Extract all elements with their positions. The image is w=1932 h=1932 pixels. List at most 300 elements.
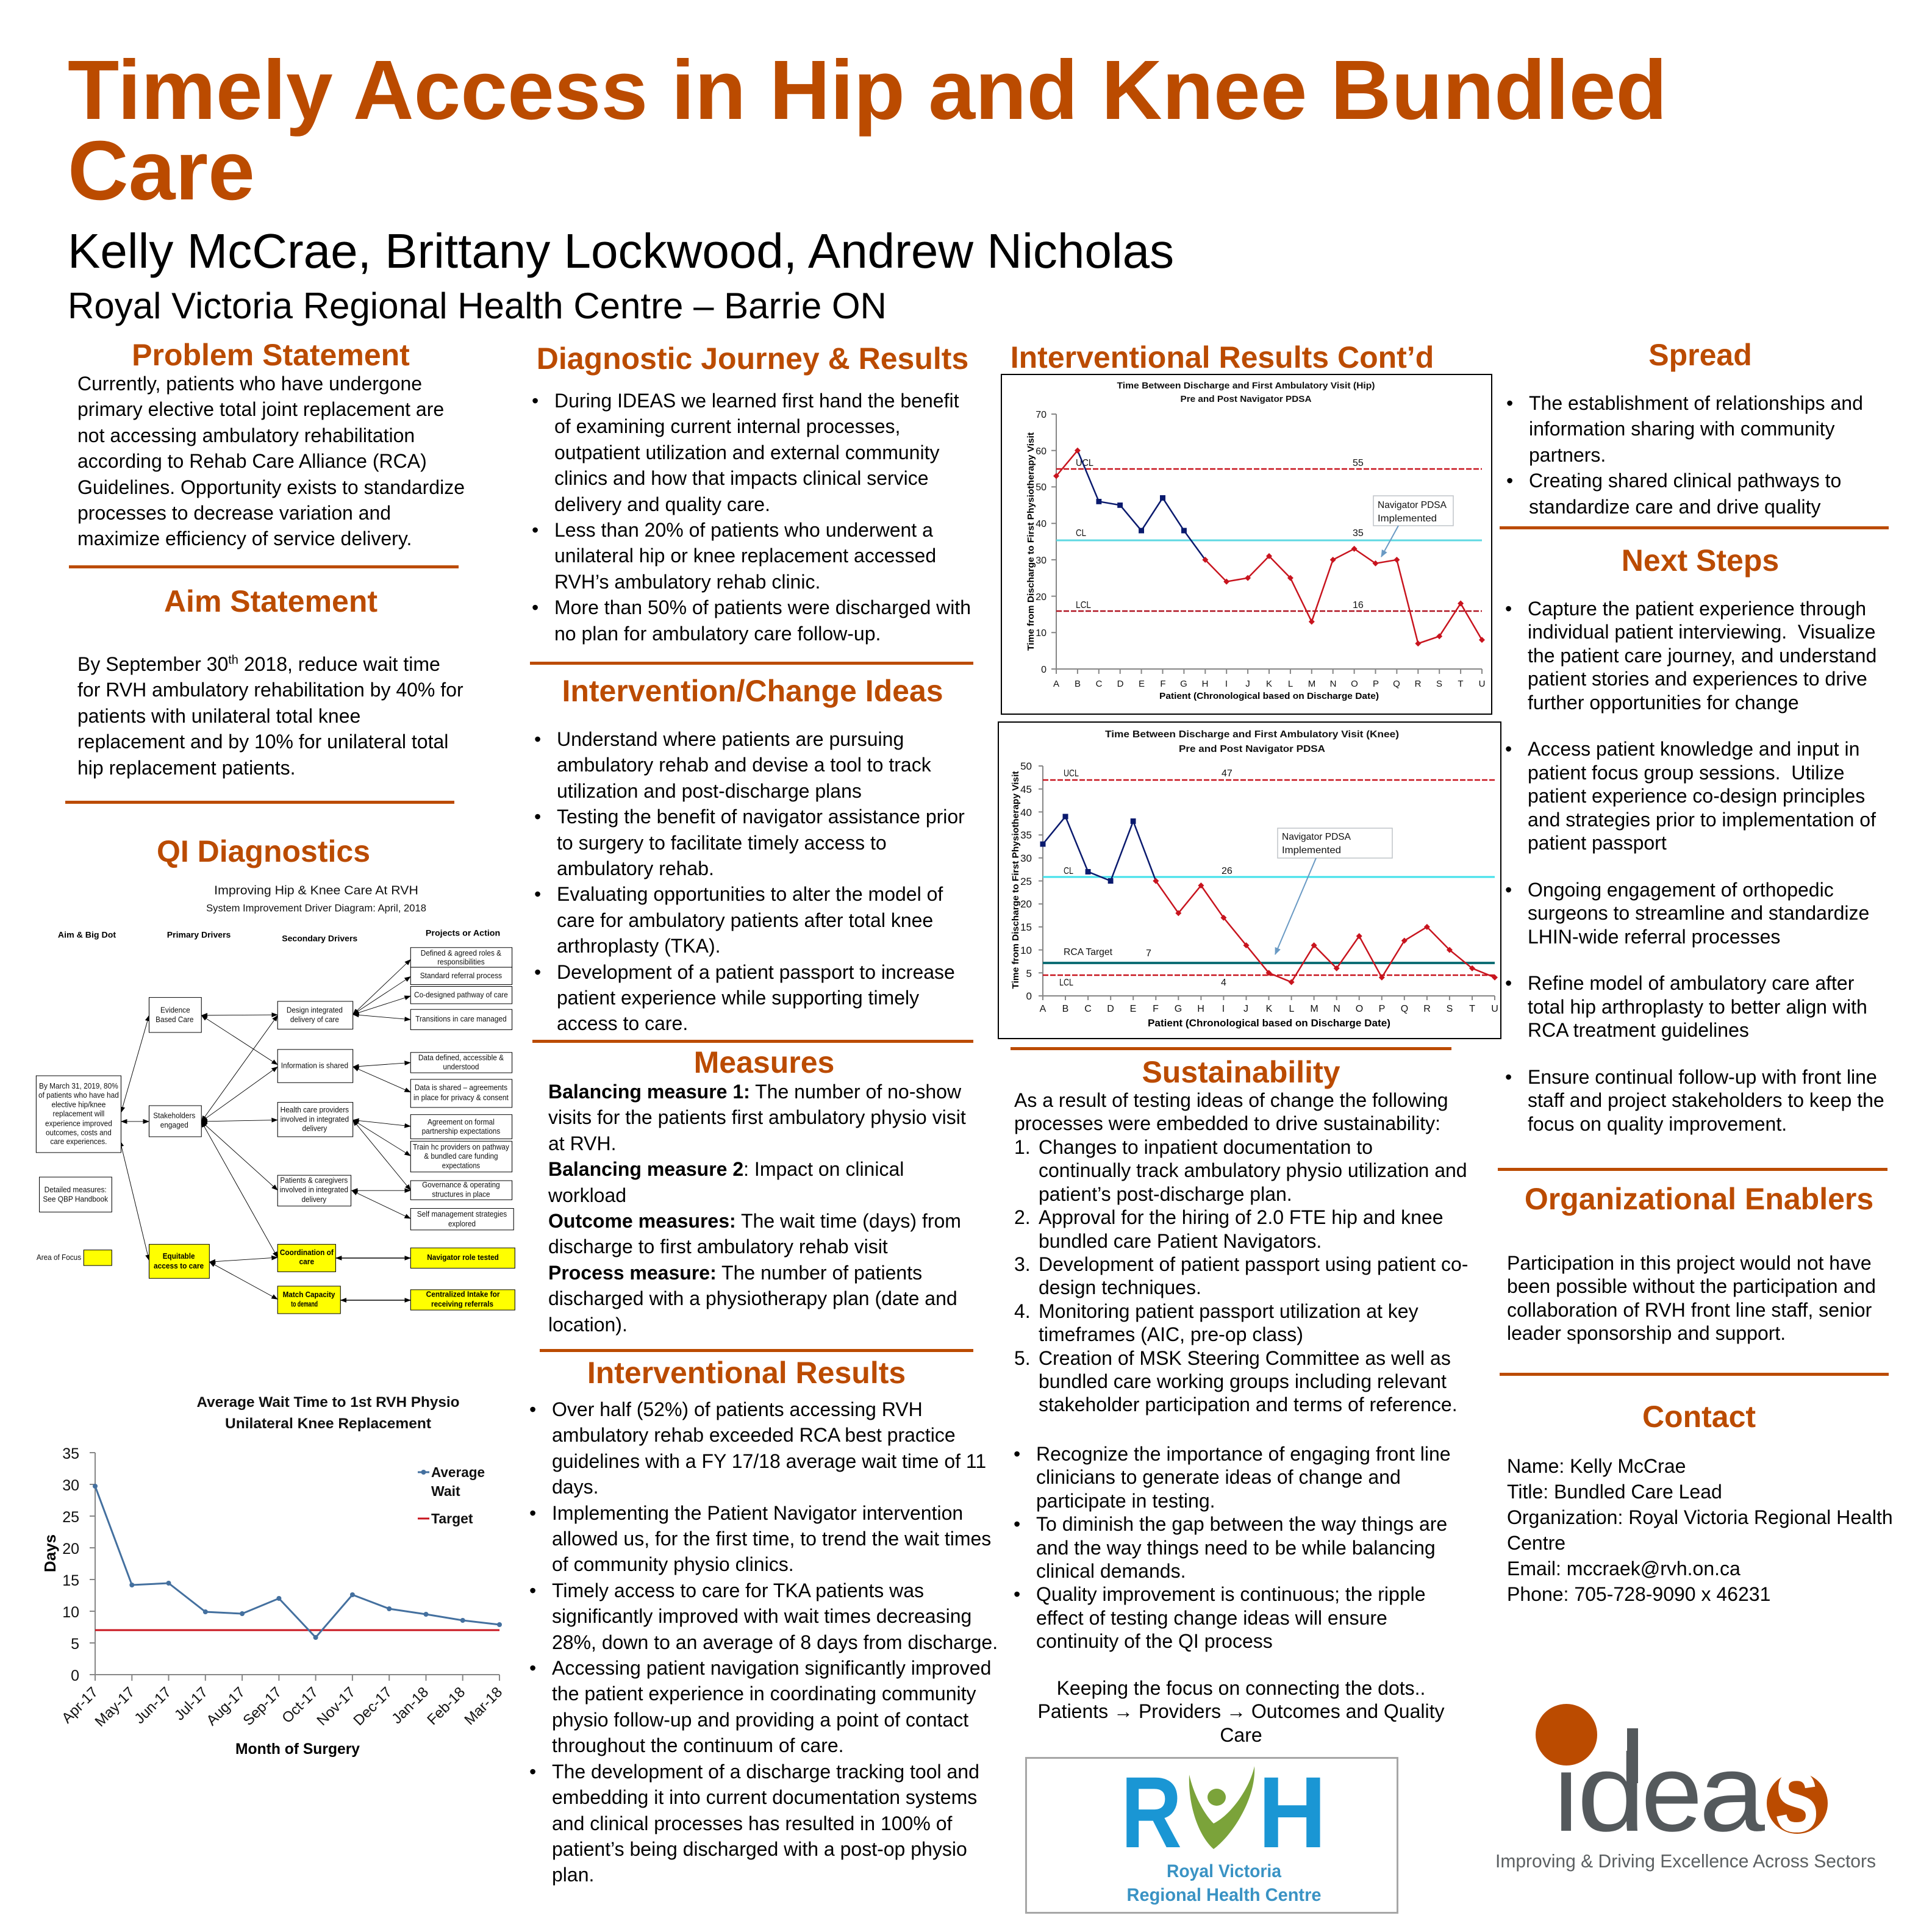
box labels: Co-designed pathway of care bbox=[414, 990, 508, 1000]
bullets: change ideas: arthroplasty (TKA). bbox=[557, 935, 721, 957]
heading: organizational enablers: Organizational Enablers bbox=[1525, 1182, 1873, 1216]
chart title: Unilateral Knee Replacement bbox=[225, 1415, 431, 1432]
x labels: K bbox=[1266, 679, 1272, 689]
x labels: N bbox=[1333, 1004, 1340, 1014]
box labels: Based Care bbox=[156, 1015, 193, 1024]
x labels: M bbox=[1308, 679, 1315, 689]
box labels: Transitions in care managed bbox=[415, 1014, 507, 1023]
x labels: L bbox=[1288, 679, 1293, 689]
bullets: next steps: total hip arthroplasty to better align with bbox=[1528, 996, 1867, 1018]
box labels: See QBP Handbook bbox=[43, 1195, 108, 1203]
box labels: delivery bbox=[302, 1124, 327, 1133]
y axis labels: 20 bbox=[62, 1540, 79, 1558]
bullets: next steps: patient stories and experiences to drive bbox=[1528, 668, 1867, 690]
x labels: F bbox=[1153, 1004, 1159, 1014]
bullets: next steps: patient focus group sessions. Utilize bbox=[1528, 762, 1844, 784]
column headers bbox=[58, 929, 500, 943]
box labels: elective hip/knee bbox=[51, 1100, 106, 1109]
bullets: spread: information sharing with community bbox=[1529, 418, 1835, 440]
bullets: spread: The establishment of relationships and bbox=[1529, 392, 1863, 414]
box labels: delivery of care bbox=[290, 1015, 339, 1024]
callout: navigator PDSA: Navigator PDSA bbox=[1378, 500, 1447, 510]
text: aim statement bbox=[77, 653, 463, 779]
chart title bbox=[1117, 381, 1375, 404]
text: connecting the dots: Keeping the focus on connecting the dots.. bbox=[1057, 1677, 1425, 1699]
bullets: next steps bbox=[1505, 598, 1884, 1135]
heading: problem statement: Problem Statement bbox=[132, 338, 410, 372]
numbered list: sustainability: 4. bbox=[1014, 1300, 1031, 1322]
focus box labels: care bbox=[299, 1258, 314, 1266]
bullets: interventional results: guidelines with a FY 17/18 average wait time of 11 bbox=[552, 1450, 986, 1472]
y axis labels: 0 bbox=[71, 1667, 79, 1684]
chart title bbox=[1105, 729, 1399, 754]
bullets: sustainability: participate in testing. bbox=[1036, 1490, 1215, 1512]
y labels: 40 bbox=[1036, 519, 1046, 529]
text: connecting the dots: Patients → Providers → Outcomes and Quality bbox=[1038, 1700, 1444, 1722]
bullets: interventional results: significantly improved with wait times decreasing bbox=[552, 1605, 971, 1627]
box labels: in place for privacy & consent bbox=[413, 1093, 509, 1102]
box labels: Standard referral process bbox=[420, 971, 503, 980]
chart title: Average Wait Time to 1st RVH Physio bbox=[196, 1394, 460, 1411]
focus box labels: receiving referrals bbox=[431, 1300, 493, 1308]
axis titles bbox=[1011, 771, 1390, 1029]
x labels: R bbox=[1423, 1004, 1431, 1014]
panel: next steps bbox=[1505, 543, 1884, 1135]
text: measures: discharged with a physiotherapy plan (date and bbox=[548, 1287, 957, 1309]
logo: RVH: H bbox=[1258, 1756, 1326, 1869]
box labels: Design integrated bbox=[287, 1006, 343, 1014]
numbered list: sustainability bbox=[1014, 1136, 1468, 1415]
title bbox=[68, 43, 1667, 218]
logo: IDEAS: s bbox=[1773, 1730, 1820, 1856]
x labels: H bbox=[1197, 1004, 1204, 1014]
y labels: 5 bbox=[1026, 968, 1032, 979]
bullets: change ideas: • bbox=[534, 806, 541, 828]
text: contact: Organization: Royal Victoria Regional Health bbox=[1507, 1506, 1893, 1528]
text: contact: Title: Bundled Care Lead bbox=[1507, 1481, 1722, 1503]
column headers: Primary Drivers bbox=[167, 931, 231, 940]
data line: start bbox=[1056, 451, 1078, 476]
x labels: C bbox=[1096, 679, 1103, 689]
x labels: F bbox=[1160, 679, 1166, 689]
control lines bbox=[1056, 469, 1482, 611]
x labels: Q bbox=[1393, 679, 1400, 689]
bullets: diagnostic journey bbox=[532, 390, 971, 645]
bullets: sustainability: and the way things need to be while balancing bbox=[1036, 1537, 1436, 1559]
bullets: interventional results: embedding it into current documentation systems bbox=[552, 1786, 977, 1808]
bullets: change ideas: • bbox=[534, 883, 541, 905]
x labels: M bbox=[1310, 1004, 1318, 1014]
text: organizational enablers: collaboration of RVH front line staff, senior bbox=[1507, 1299, 1872, 1321]
chart: hip control chart bbox=[1001, 374, 1492, 715]
y labels: 25 bbox=[1020, 876, 1032, 887]
text: measures: Balancing measure 1: The number of no-show bbox=[548, 1081, 961, 1103]
callout: navigator PDSA bbox=[1373, 496, 1453, 557]
chart title: Time Between Discharge and First Ambulatory Visit (Hip) bbox=[1117, 381, 1375, 391]
bullets: diagnostic journey: During IDEAS we learned first hand the benefit bbox=[554, 390, 959, 412]
x labels: K bbox=[1266, 1004, 1273, 1014]
driver boxes bbox=[36, 948, 513, 1230]
bullets: next steps: Refine model of ambulatory care after bbox=[1528, 972, 1854, 994]
control lines bbox=[1043, 780, 1495, 975]
bullets: spread: standardize care and drive quality bbox=[1529, 496, 1821, 518]
bullets: diagnostic journey: Less than 20% of patients who underwent a bbox=[554, 519, 933, 541]
bullets: diagnostic journey: outpatient utilization and external community bbox=[554, 442, 939, 463]
control line labels: 16 bbox=[1353, 600, 1364, 610]
diagram title: System Improvement Driver Diagram: April, 2018 bbox=[206, 902, 426, 914]
box labels bbox=[37, 948, 509, 1262]
bullets: next steps: staff and project stakeholders to keep the bbox=[1528, 1089, 1884, 1111]
bullets: next steps: individual patient interviewing. Visualize bbox=[1528, 621, 1875, 643]
bullets: diagnostic journey: no plan for ambulatory care follow-up. bbox=[554, 623, 881, 645]
heading: intervention change ideas: Intervention/Change Ideas bbox=[562, 674, 943, 708]
bullets: sustainability: • bbox=[1014, 1583, 1020, 1605]
box labels: involved in integrated bbox=[280, 1185, 348, 1194]
x labels: U bbox=[1479, 679, 1485, 689]
logo: IDEAS: i bbox=[1554, 1731, 1578, 1855]
axes bbox=[90, 1453, 499, 1681]
x labels: J bbox=[1243, 1004, 1248, 1014]
panel: diagnostic journey and results bbox=[532, 342, 971, 645]
y labels: 0 bbox=[1041, 665, 1046, 675]
bullets: spread: Creating shared clinical pathways to bbox=[1529, 470, 1841, 492]
bullets: sustainability: Recognize the importance of engaging front line bbox=[1036, 1443, 1451, 1465]
x labels: D bbox=[1107, 1004, 1114, 1014]
y labels: 60 bbox=[1036, 446, 1046, 457]
box labels: understood bbox=[443, 1062, 479, 1072]
box labels: Stakeholders bbox=[153, 1111, 196, 1120]
numbered list: sustainability: continually track ambulatory physio utilization and bbox=[1039, 1159, 1467, 1181]
bullets: interventional results: • bbox=[529, 1657, 536, 1679]
box labels: Detailed measures: bbox=[45, 1185, 107, 1194]
numbered list: sustainability: 1. bbox=[1014, 1136, 1031, 1158]
x labels bbox=[1053, 679, 1485, 689]
bullets: next steps: and strategies prior to implementation of bbox=[1528, 809, 1876, 831]
box labels: delivery bbox=[301, 1195, 327, 1204]
bullets: interventional results: Over half (52%) of patients accessing RVH bbox=[552, 1398, 923, 1420]
average wait line bbox=[95, 1486, 499, 1637]
bullets: diagnostic journey: RVH’s ambulatory rehab clinic. bbox=[554, 571, 820, 593]
heading: interventional results cont'd: Interventional Results Cont’d bbox=[1011, 340, 1434, 374]
text: contact: Email: mccraek@rvh.on.ca bbox=[1507, 1558, 1741, 1580]
y labels: 10 bbox=[1036, 628, 1046, 639]
focus box labels: to demand bbox=[291, 1300, 318, 1308]
panel: interventional results bbox=[529, 1356, 998, 1886]
logo: IDEAS: e bbox=[1641, 1731, 1703, 1855]
panel: contact bbox=[1507, 1400, 1893, 1605]
axis titles: Patient (Chronological based on Discharge Date) bbox=[1148, 1017, 1390, 1029]
bullets: next steps: Access patient knowledge and input in bbox=[1528, 738, 1859, 760]
box labels: involved in integrated bbox=[281, 1115, 349, 1123]
bullets: next steps: Ensure continual follow-up with front line bbox=[1528, 1066, 1877, 1088]
column headers: Projects or Action bbox=[426, 929, 500, 939]
bullets: next steps: Capture the patient experience through bbox=[1528, 598, 1866, 620]
x labels: P bbox=[1379, 1004, 1385, 1014]
text: problem statement: according to Rehab Care Alliance (RCA) bbox=[77, 450, 427, 472]
text: aim statement: replacement and by 10% for unilateral total bbox=[77, 731, 448, 753]
control line labels: UCL bbox=[1064, 768, 1079, 779]
bullets: next steps: further opportunities for change bbox=[1528, 692, 1799, 714]
box labels: By March 31, 2019, 80% bbox=[39, 1081, 118, 1090]
focus box labels: Navigator role tested bbox=[427, 1253, 499, 1262]
callout: navigator PDSA: Navigator PDSA bbox=[1282, 832, 1351, 842]
box labels: Self management strategies bbox=[417, 1209, 507, 1218]
box labels: responsibilities bbox=[437, 957, 485, 967]
bullets: diagnostic journey: • bbox=[532, 390, 538, 412]
control line labels: 47 bbox=[1222, 768, 1233, 779]
box labels: expectations bbox=[442, 1161, 480, 1170]
panel: intervention change ideas bbox=[534, 674, 965, 1034]
box labels: Health care providers bbox=[281, 1106, 349, 1114]
target line bbox=[95, 1630, 499, 1631]
box labels: Area of Focus bbox=[37, 1253, 81, 1262]
control line labels: 7 bbox=[1146, 948, 1151, 959]
focus box labels: access to care bbox=[154, 1261, 204, 1270]
bullets: next steps: focus on quality improvement. bbox=[1528, 1113, 1787, 1135]
x labels: L bbox=[1289, 1004, 1295, 1014]
x labels: I bbox=[1222, 1004, 1225, 1014]
heading: QI diagnostics: QI Diagnostics bbox=[157, 834, 370, 868]
y labels: 20 bbox=[1020, 898, 1032, 910]
bullets: interventional results: ambulatory rehab exceeded RCA best practice bbox=[552, 1424, 956, 1446]
chart title: Pre and Post Navigator PDSA bbox=[1181, 394, 1312, 404]
logo: IDEAS: a bbox=[1699, 1731, 1765, 1855]
numbered list: sustainability: 2. bbox=[1014, 1206, 1031, 1228]
x labels: A bbox=[1053, 679, 1059, 689]
diagram title bbox=[206, 883, 426, 914]
bullets: next steps: • bbox=[1505, 598, 1512, 620]
bullets: change ideas: utilization and post-discharge plans bbox=[557, 780, 862, 802]
x labels: R bbox=[1415, 679, 1422, 689]
text: problem statement: Currently, patients who have undergone bbox=[77, 373, 422, 395]
bullets: interventional results: Accessing patient navigation significantly improved bbox=[552, 1657, 991, 1679]
bullets: change ideas: Development of a patient passport to increase bbox=[557, 961, 955, 983]
bullets: next steps: RCA treatment guidelines bbox=[1528, 1019, 1749, 1041]
heading: next steps: Next Steps bbox=[1622, 543, 1779, 578]
bullets: sustainability: • bbox=[1014, 1513, 1020, 1535]
x labels: A bbox=[1040, 1004, 1046, 1014]
y axis labels: 25 bbox=[62, 1509, 79, 1526]
chart title: Time Between Discharge and First Ambulatory Visit (Knee) bbox=[1105, 729, 1399, 740]
bullets: interventional results: • bbox=[529, 1398, 536, 1420]
text: problem statement: not accessing ambulatory rehabilitation bbox=[77, 424, 415, 446]
box labels: explored bbox=[448, 1219, 476, 1228]
bullets: interventional results bbox=[529, 1398, 998, 1886]
text: measures: Outcome measures: The wait time (days) from bbox=[548, 1210, 961, 1232]
logo: IDEAS bbox=[1495, 1704, 1876, 1872]
bullets: change ideas: • bbox=[534, 728, 541, 750]
bullets: change ideas: Understand where patients are pursuing bbox=[557, 728, 904, 750]
logo: IDEAS: Improving & Driving Excellence Across Sectors bbox=[1495, 1850, 1876, 1872]
bullets: next steps: patient experience co-design principles bbox=[1528, 785, 1865, 807]
text: organizational enablers: Participation in this project would not have bbox=[1507, 1252, 1872, 1274]
x labels: G bbox=[1180, 679, 1187, 689]
bullets: spread: partners. bbox=[1529, 444, 1606, 466]
box labels: Data defined, accessible & bbox=[418, 1053, 504, 1062]
text: problem statement: primary elective total joint replacement are bbox=[77, 398, 444, 420]
text: measures: workload bbox=[548, 1184, 626, 1206]
box labels: & bundled care funding bbox=[424, 1152, 498, 1161]
bullets: interventional results: throughout the continuum of care. bbox=[552, 1734, 844, 1756]
panel: organizational enablers bbox=[1507, 1182, 1876, 1344]
text: organizational enablers: been possible without the participation and bbox=[1507, 1275, 1876, 1297]
callout: navigator PDSA: Implemented bbox=[1282, 845, 1341, 856]
x labels: U bbox=[1491, 1004, 1498, 1014]
bullets: change ideas: • bbox=[534, 961, 541, 983]
bullets: interventional results: patient’s being discharged with a post-op physio bbox=[552, 1838, 967, 1860]
heading: spread: Spread bbox=[1648, 338, 1752, 372]
bullets: interventional results: • bbox=[529, 1761, 536, 1783]
bullets: sustainability bbox=[1014, 1443, 1451, 1652]
bullets: diagnostic journey: clinics and how that impacts clinical service bbox=[554, 467, 929, 489]
bullets: sustainability: • bbox=[1014, 1443, 1020, 1465]
logo: RVH: Royal Victoria bbox=[1167, 1861, 1281, 1881]
y labels bbox=[1036, 410, 1046, 675]
x labels: H bbox=[1202, 679, 1208, 689]
logo: RVH: Regional Health Centre bbox=[1127, 1885, 1321, 1905]
bullets: change ideas: access to care. bbox=[557, 1012, 688, 1034]
axis titles: Days bbox=[41, 1534, 59, 1572]
bullets: spread: • bbox=[1506, 470, 1513, 492]
numbered list: sustainability: timeframes (AIC, pre-op class) bbox=[1039, 1323, 1303, 1345]
box labels: Evidence bbox=[160, 1006, 190, 1014]
bullets: next steps: • bbox=[1505, 1066, 1512, 1088]
logo: RVH: R bbox=[1121, 1756, 1182, 1869]
x axis labels: Jan-18 bbox=[388, 1684, 432, 1727]
text: sustainability intro: processes were embedded to drive sustainability: bbox=[1014, 1112, 1440, 1134]
x axis labels: Aug-17 bbox=[203, 1684, 248, 1729]
text: organizational enablers bbox=[1507, 1252, 1876, 1344]
bullets: next steps: the patient care journey, and understand bbox=[1528, 645, 1877, 667]
numbered list: sustainability: Changes to inpatient documentation to bbox=[1039, 1136, 1373, 1158]
x labels: S bbox=[1447, 1004, 1453, 1014]
heading: interventional results: Interventional Results bbox=[587, 1356, 906, 1390]
chart title bbox=[196, 1394, 460, 1432]
bullets: diagnostic journey: More than 50% of patients were discharged with bbox=[554, 596, 971, 618]
logo: RVH bbox=[1025, 1756, 1398, 1914]
bullets: sustainability: To diminish the gap between the way things are bbox=[1036, 1513, 1447, 1535]
x axis labels: May-17 bbox=[92, 1684, 138, 1730]
chart title: Pre and Post Navigator PDSA bbox=[1179, 744, 1325, 754]
y labels: 30 bbox=[1020, 853, 1032, 864]
text: contact bbox=[1507, 1455, 1893, 1605]
box labels: engaged bbox=[160, 1120, 188, 1129]
y labels: 40 bbox=[1020, 807, 1032, 818]
heading: diagnostic journey and results: Diagnostic Journey & Results bbox=[537, 342, 968, 376]
text: connecting the dots bbox=[1038, 1677, 1444, 1746]
bullets: interventional results: Timely access to care for TKA patients was bbox=[552, 1580, 924, 1601]
numbered list: sustainability: Approval for the hiring of 2.0 FTE hip and knee bbox=[1039, 1206, 1443, 1228]
affiliation: Royal Victoria Regional Health Centre – Barrie ON bbox=[68, 285, 887, 326]
box labels: replacement will bbox=[53, 1109, 104, 1118]
box labels: outcomes, costs and bbox=[46, 1128, 112, 1137]
y labels: 45 bbox=[1020, 784, 1032, 795]
axis titles: Time from Discharge to First Physiotherapy Visit bbox=[1011, 771, 1021, 989]
authors: Kelly McCrae, Brittany Lockwood, Andrew Nicholas bbox=[68, 224, 1174, 278]
control line labels: RCA Target bbox=[1064, 947, 1113, 957]
focus box labels: Coordination of bbox=[280, 1248, 334, 1257]
control line labels: 55 bbox=[1353, 458, 1364, 468]
bullets: next steps: LHIN-wide referral processes bbox=[1528, 926, 1780, 948]
text: problem statement: Guidelines. Opportunity exists to standardize bbox=[77, 476, 465, 498]
control line labels: UCL bbox=[1076, 458, 1093, 468]
y labels: 15 bbox=[1020, 921, 1032, 933]
x labels: I bbox=[1225, 679, 1228, 689]
panel: aim statement bbox=[77, 584, 463, 779]
frame bbox=[998, 722, 1501, 1039]
y axis labels: 15 bbox=[62, 1572, 79, 1589]
text: measures bbox=[548, 1081, 966, 1336]
text: organizational enablers: leader sponsorship and support. bbox=[1507, 1322, 1786, 1344]
text: measures: at RVH. bbox=[548, 1132, 616, 1154]
numbered list: sustainability: stakeholder participation and terms of reference. bbox=[1039, 1394, 1458, 1415]
y labels: 20 bbox=[1036, 592, 1046, 603]
bullets: interventional results: • bbox=[529, 1580, 536, 1601]
panel: problem statement bbox=[77, 338, 465, 549]
panel: sustainability bbox=[1014, 1055, 1468, 1746]
x labels: C bbox=[1084, 1004, 1092, 1014]
bullets: change ideas: to surgery to facilitate timely access to bbox=[557, 832, 887, 854]
axis titles: Patient (Chronological based on Discharge Date) bbox=[1159, 691, 1379, 701]
chart: average wait time bbox=[41, 1394, 506, 1758]
x axis labels: Dec-17 bbox=[350, 1684, 395, 1729]
text: aim statement: patients with unilateral total knee bbox=[77, 705, 360, 727]
bullets: diagnostic journey: • bbox=[532, 596, 538, 618]
y axis labels: 35 bbox=[62, 1445, 79, 1462]
x labels: N bbox=[1330, 679, 1336, 689]
box labels: partnership expectations bbox=[422, 1126, 501, 1136]
text: problem statement: maximize efficiency of service delivery. bbox=[77, 528, 412, 549]
axes bbox=[1039, 766, 1495, 1000]
control line labels: LCL bbox=[1059, 978, 1073, 988]
x labels: O bbox=[1351, 679, 1358, 689]
control line labels: 26 bbox=[1222, 866, 1233, 876]
text: aim statement: hip replacement patients. bbox=[77, 757, 296, 779]
control line labels: LCL bbox=[1076, 600, 1091, 610]
y labels bbox=[1020, 760, 1032, 1002]
legend: Wait bbox=[431, 1483, 460, 1499]
y labels: 30 bbox=[1036, 556, 1046, 566]
control line labels: CL bbox=[1076, 528, 1086, 538]
title: Timely Access in Hip and Knee Bundled bbox=[68, 43, 1667, 137]
bullets: sustainability: Quality improvement is continuous; the ripple bbox=[1036, 1583, 1426, 1605]
legend: Average bbox=[431, 1464, 485, 1480]
bullets: change ideas: ambulatory rehab and devise a tool to track bbox=[557, 754, 931, 776]
text: measures: visits for the patients first ambulatory physio visit bbox=[548, 1106, 966, 1128]
box labels: Patients & caregivers bbox=[280, 1176, 348, 1184]
x axis labels: Jun-17 bbox=[131, 1684, 174, 1727]
data line: post navigator bbox=[1205, 549, 1482, 643]
connector arrows bbox=[120, 959, 410, 1300]
heading: aim statement: Aim Statement bbox=[164, 584, 377, 618]
bullets: interventional results: 28%, down to an average of 8 days from discharge. bbox=[552, 1631, 998, 1653]
x axis labels: Nov-17 bbox=[313, 1684, 359, 1729]
x axis labels: Apr-17 bbox=[59, 1684, 101, 1726]
box labels: experience improved bbox=[45, 1119, 112, 1128]
axis titles bbox=[1026, 432, 1379, 701]
y axis labels: 10 bbox=[62, 1604, 79, 1621]
bullets: next steps: • bbox=[1505, 738, 1512, 760]
x axis labels: Feb-18 bbox=[424, 1684, 468, 1728]
text: contact: Name: Kelly McCrae bbox=[1507, 1455, 1686, 1477]
bullets: interventional results: plan. bbox=[552, 1864, 594, 1886]
focus box labels bbox=[154, 1248, 499, 1308]
bullets: next steps: • bbox=[1505, 972, 1512, 994]
focus box labels: Centralized Intake for bbox=[426, 1290, 499, 1298]
bullets: change ideas: patient experience while supporting timely bbox=[557, 987, 919, 1009]
y labels: 10 bbox=[1020, 945, 1032, 956]
bullets: spread: • bbox=[1506, 392, 1513, 414]
